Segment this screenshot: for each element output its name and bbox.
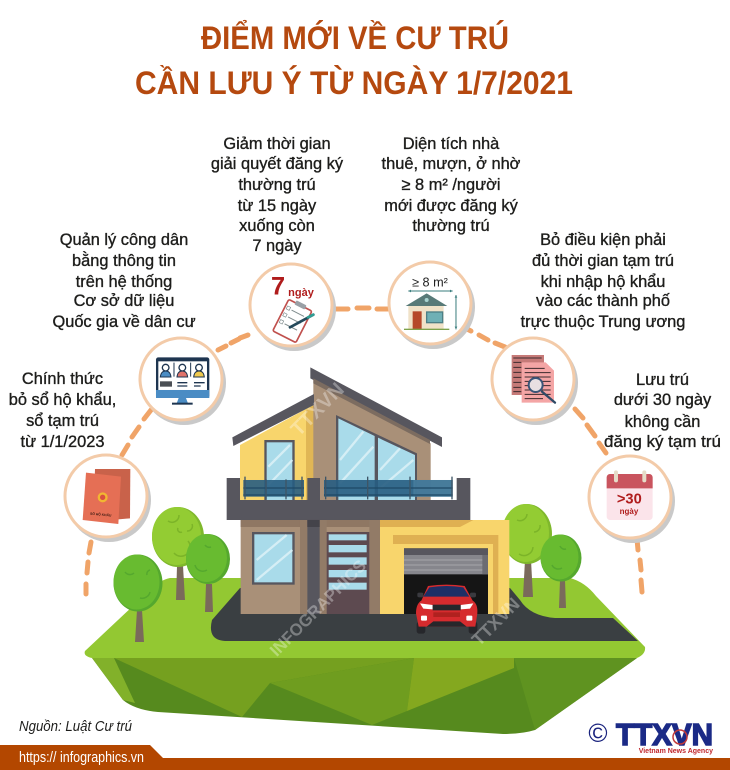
red car <box>416 585 477 634</box>
icon circle: 7 days checklist: 7 <box>271 273 285 301</box>
text: minimum rented floor area: thuê, mượn, ở nhờ <box>382 155 521 173</box>
text: citizen database: trên hệ thống <box>76 273 172 291</box>
tree: front left <box>186 534 230 612</box>
watermark: INFOGRAPHICS <box>266 556 370 660</box>
tree: right small <box>540 534 582 608</box>
text: remove temporary residence condition: đủ thời gian tạm trú <box>532 252 674 270</box>
text: minimum rented floor area: ≥ 8 m² /người <box>401 176 501 194</box>
text: minimum rented floor area <box>382 135 521 235</box>
text: abolish household book: từ 1/1/2023 <box>21 433 104 451</box>
tree: right big <box>502 504 552 597</box>
footer url: https:// infographics.vn <box>19 749 144 766</box>
text: minimum rented floor area: thường trú <box>412 217 490 235</box>
text: citizen database <box>52 231 196 331</box>
text: minimum rented floor area: mới được đăng ký <box>384 197 519 215</box>
text: stays under 30 days <box>604 371 721 451</box>
ground facets <box>92 658 637 734</box>
text: remove temporary residence condition: vào các thành phố <box>536 292 670 310</box>
text: stays under 30 days: Lưu trú <box>636 371 689 389</box>
road <box>211 588 638 641</box>
watermark <box>266 379 524 660</box>
footer bar <box>0 745 730 770</box>
title <box>135 20 573 101</box>
balcony slab <box>227 478 470 520</box>
icon circle: monitor with citizen profiles <box>140 338 226 425</box>
text: remove temporary residence condition: trực thuộc Trung ương <box>521 313 685 331</box>
title: ĐIỂM MỚI VỀ CƯ TRÚ <box>201 20 509 56</box>
text: citizen database: Cơ sở dữ liệu <box>74 292 174 310</box>
icon circle: household books: SỔ HỘ KHẨU <box>90 511 112 518</box>
TTXVN logo: Vietnam News Agency <box>639 748 713 755</box>
text: citizen database: bằng thông tin <box>72 251 176 270</box>
text: shorter processing time: từ 15 ngày <box>238 197 317 215</box>
island ground <box>85 578 645 734</box>
garage frame <box>380 520 509 614</box>
dashed arc connecting the circles <box>86 308 642 594</box>
watermark: TTXVN <box>468 594 524 650</box>
icon circle: 7 days checklist <box>250 264 336 351</box>
balcony glass left <box>243 477 304 499</box>
balcony glass right <box>324 477 453 499</box>
lower window <box>252 532 295 585</box>
upper right window <box>336 415 417 500</box>
front door <box>327 532 369 614</box>
tree: far left <box>114 554 162 642</box>
title: CẦN LƯU Ý TỪ NGÀY 1/7/2021 <box>135 65 573 101</box>
text: shorter processing time: Giảm thời gian <box>223 135 331 153</box>
text: remove temporary residence condition: khi nhập hộ khẩu <box>541 273 665 291</box>
text: shorter processing time: xuống còn <box>239 217 315 235</box>
house <box>227 367 509 634</box>
TTXVN logo <box>588 717 713 755</box>
watermark: TTXVN <box>287 379 349 441</box>
text: shorter processing time: giải quyết đăng ký <box>211 155 344 173</box>
text: citizen database: Quốc gia về dân cư <box>52 313 196 331</box>
icon circle: calendar over 30 days: ngày <box>620 507 639 516</box>
icon circle: calendar over 30 days <box>589 456 675 543</box>
source note: Nguồn: Luật Cư trú <box>19 718 133 735</box>
text: abolish household book <box>9 370 116 451</box>
text: abolish household book: bỏ sổ hộ khẩu, <box>9 391 116 409</box>
icon circle: documents under magnifier <box>492 338 578 425</box>
text: remove temporary residence condition: Bỏ điều kiện phải <box>540 231 666 249</box>
text: citizen database: Quản lý công dân <box>60 231 188 249</box>
text: shorter processing time <box>211 135 344 255</box>
text: shorter processing time: thường trú <box>238 176 316 194</box>
upper left window <box>264 440 295 500</box>
upper right brown wall <box>313 380 431 500</box>
text: abolish household book: Chính thức <box>22 370 103 388</box>
text: remove temporary residence condition <box>521 231 685 331</box>
icon circle: house with area of 8 square metres: ≥ 8 m² <box>412 276 448 290</box>
text: stays under 30 days: không cần <box>625 413 700 431</box>
left roof <box>232 394 314 446</box>
icon circle: 7 days checklist: ngày <box>288 287 315 299</box>
text: stays under 30 days: đăng ký tạm trú <box>604 433 721 451</box>
text: stays under 30 days: dưới 30 ngày <box>614 391 712 409</box>
text: shorter processing time: 7 ngày <box>252 237 302 255</box>
column <box>307 520 320 614</box>
upper left yellow wall <box>240 405 313 500</box>
text: minimum rented floor area: Diện tích nhà <box>403 135 500 153</box>
TTXVN logo: TTXVN <box>616 717 713 752</box>
icon circle: house with area of 8 square metres <box>389 262 475 349</box>
TTXVN logo: © <box>588 718 608 748</box>
text: abolish household book: sổ tạm trú <box>26 412 99 430</box>
tree: back left <box>152 507 204 600</box>
icon circle: calendar over 30 days: >30 <box>617 492 642 508</box>
right roof <box>310 367 442 447</box>
lower wall <box>241 520 380 614</box>
icon circle: household books <box>65 455 151 542</box>
